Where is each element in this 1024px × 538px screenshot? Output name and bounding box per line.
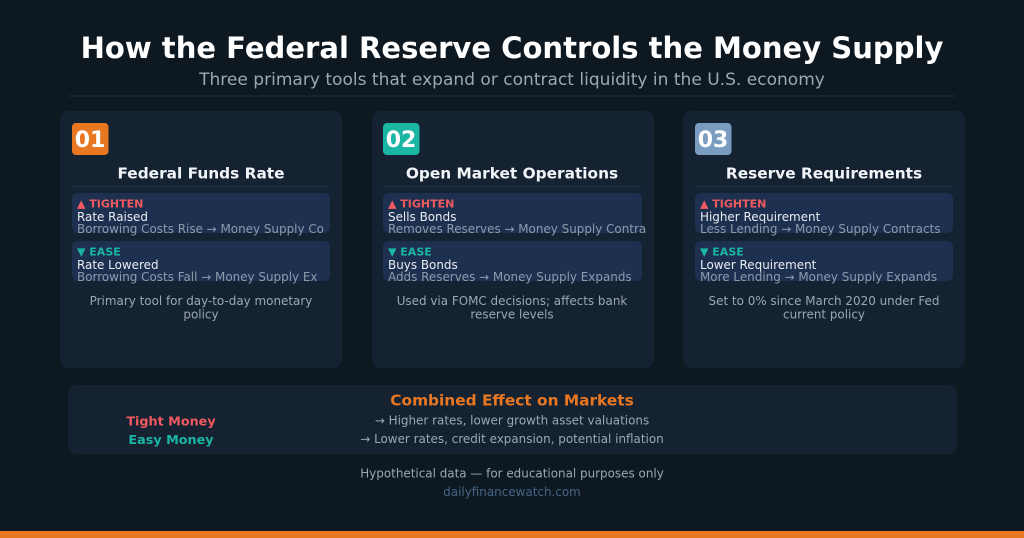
heading: open market operations: Open Market Operations (406, 164, 618, 182)
ease row: Adds Reserves → Money Supply Expands (388, 270, 632, 284)
ease row: Lower Requirement (700, 258, 817, 272)
note: Used via FOMC decisions; affects bank (397, 294, 627, 308)
panel: federal funds rate (60, 111, 342, 368)
ease row: Borrowing Costs Fall → Money Supply Ex (77, 270, 317, 284)
note: Primary tool for day-to-day monetary (90, 294, 312, 308)
tight money row (126, 414, 649, 429)
panel: reserve requirements (683, 111, 965, 368)
tighten row: Rate Raised (77, 210, 148, 224)
title: How the Federal Reserve Controls the Money Supply (81, 31, 943, 65)
panel: combined effect (68, 385, 957, 454)
tight money row: Tight Money (126, 414, 216, 429)
icon: badge 02 (383, 123, 420, 155)
subtitle: Three primary tools that expand or contract liquidity in the U.S. economy (198, 70, 825, 90)
note (709, 294, 939, 322)
ease row: Buys Bonds (388, 258, 458, 272)
heading: reserve requirements: Reserve Requirements (726, 164, 922, 182)
tighten row: ▲ TIGHTEN (77, 198, 143, 211)
tighten row: Higher Requirement (700, 210, 821, 224)
tighten row (383, 193, 646, 236)
icon: badge 01: 01 (75, 128, 105, 153)
tighten row: ▲ TIGHTEN (388, 198, 454, 211)
tighten row: Sells Bonds (388, 210, 456, 224)
note: policy (183, 308, 219, 322)
ease row: More Lending → Money Supply Expands (700, 270, 937, 284)
tighten row (72, 193, 330, 236)
ease row (72, 241, 330, 284)
icon: badge 03: 03 (698, 128, 728, 153)
tighten row: Removes Reserves → Money Supply Contra (388, 222, 646, 236)
ease row: ▼ EASE (77, 246, 121, 259)
easy money row: → Lower rates, credit expansion, potential inflation (360, 432, 664, 446)
source: dailyfinancewatch.com (443, 485, 581, 499)
tighten row: Less Lending → Money Supply Contracts (700, 222, 940, 236)
ease row (695, 241, 953, 284)
tight money row: → Higher rates, lower growth asset valuations (375, 414, 649, 428)
easy money row (128, 432, 664, 448)
note: Set to 0% since March 2020 under Fed (709, 294, 939, 308)
heading: federal funds rate: Federal Funds Rate (117, 164, 285, 182)
tighten row (695, 193, 953, 236)
accent bar (0, 531, 1024, 538)
note: reserve levels (470, 308, 554, 322)
note (90, 294, 312, 322)
easy money row: Easy Money (128, 433, 214, 448)
tighten row: ▲ TIGHTEN (700, 198, 766, 211)
disclaimer: Hypothetical data — for educational purposes only (360, 466, 664, 480)
ease row (383, 241, 642, 284)
note (397, 294, 627, 322)
panel: open market operations (372, 111, 654, 368)
icon: badge 02: 02 (386, 128, 416, 153)
icon: badge 01 (72, 123, 108, 155)
heading: combined effect: Combined Effect on Markets (390, 392, 634, 410)
ease row: ▼ EASE (388, 246, 432, 259)
ease row: ▼ EASE (700, 246, 744, 259)
icon: badge 03 (695, 123, 732, 155)
tighten row: Borrowing Costs Rise → Money Supply Co (77, 222, 324, 236)
ease row: Rate Lowered (77, 258, 159, 272)
note: current policy (783, 308, 865, 322)
